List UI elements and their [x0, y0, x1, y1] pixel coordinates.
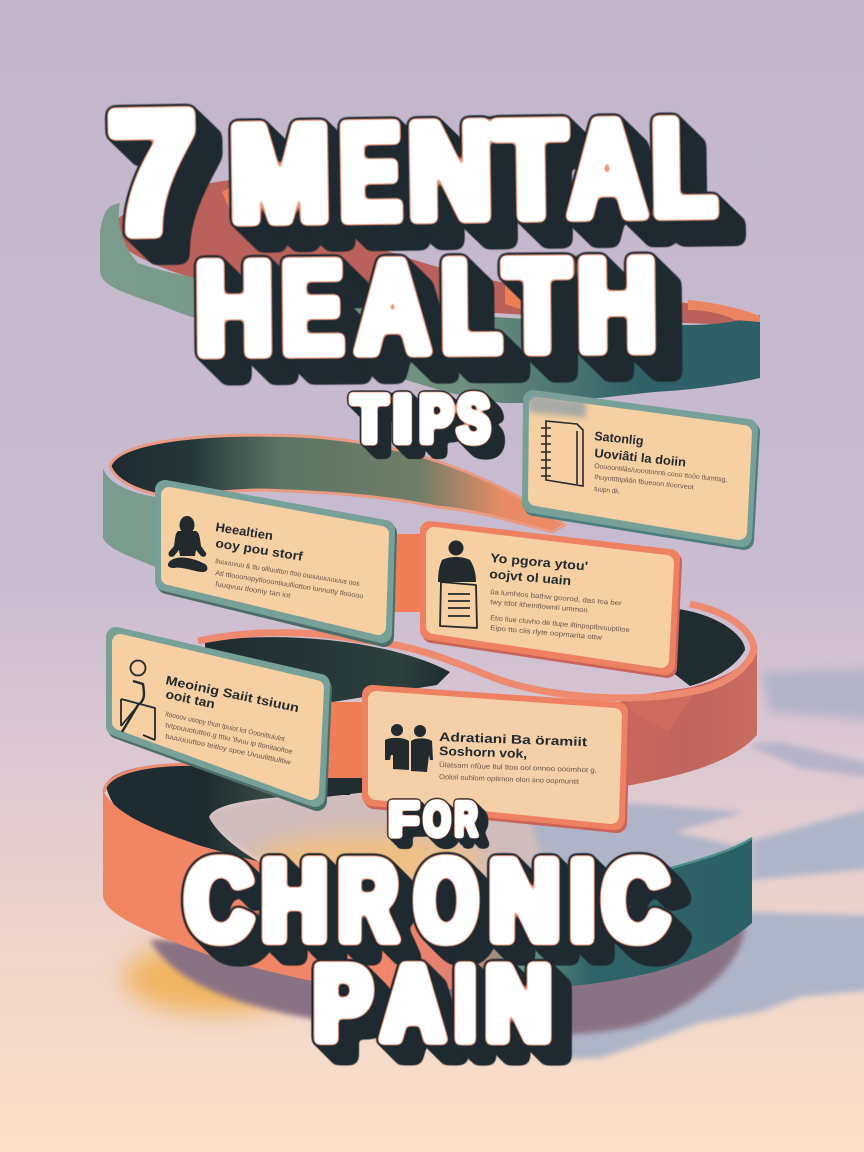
- green band left: [103, 468, 162, 570]
- card 2 text: tiuuuuvuu & ttu oilluutton ttoo ouuuuuuuuuus oos: [215, 558, 360, 588]
- title: HEALTH: L: [441, 232, 501, 380]
- title: HEALTH: H: [577, 231, 657, 379]
- icon: meditating figure: [168, 516, 207, 572]
- icon: stick figure on chair: [121, 660, 155, 740]
- card 4 text: ooit tan: [164, 687, 216, 711]
- top ribbon: [100, 180, 760, 403]
- title: CHRONIC: C: [603, 837, 668, 965]
- title: CHRONIC: N: [490, 837, 560, 965]
- card 3: person with document: [430, 531, 672, 668]
- card 5 text: Adratiani Ba öramiit: [439, 730, 588, 749]
- icon: person with document: [438, 540, 477, 628]
- card 3 text: Etio tiue cluvho de tlupe iltinpoptbvuuptitoe: [490, 615, 630, 634]
- card 4 text: tuuuuuuttoo teitloy spoe Uvuulittiulltiw: [165, 733, 292, 767]
- card 4 text: Meoinig Saiit tsiuun: [164, 673, 300, 715]
- title: [108, 76, 717, 1063]
- title: FOR: O: [424, 794, 450, 846]
- title: 7: 7: [108, 76, 197, 270]
- connector below card 4: [325, 702, 367, 778]
- title: MENTAL: L: [651, 91, 717, 246]
- card 5: two people: [372, 695, 620, 823]
- orange accent of top ribbon: [222, 183, 252, 222]
- card 2: meditation: [165, 490, 387, 637]
- card 1: notebook: [528, 394, 750, 540]
- orange accent near HEALTH: [505, 278, 545, 312]
- card 1 text: Ooooontilâs/uoootonnti cooo ttoôo tlumtisg,: [594, 463, 728, 484]
- salmon rim: [198, 604, 754, 698]
- card 2 text: Heealtien: [215, 520, 274, 543]
- card 2 text: ooy pou storf: [215, 536, 305, 564]
- card 3 text: Yo pgora ytou': [490, 551, 589, 574]
- icon: two people: [385, 724, 433, 772]
- title: TIPS: T: [352, 381, 387, 457]
- title: TIPS: P: [420, 381, 453, 457]
- floor shadows: [123, 668, 864, 1060]
- title: HEALTH: A: [355, 233, 430, 381]
- swoosh interior: [110, 435, 565, 532]
- title: PAIN: A: [382, 943, 444, 1063]
- card 3 text: twy tdot itheintlownti ummon: [490, 599, 588, 615]
- translucent overlap patch: [528, 394, 586, 418]
- title: HEALTH: E: [281, 234, 343, 381]
- card 1 text: Ihuyottttipliôn fbueoon tloorveot: [594, 474, 694, 491]
- icon: notebook: [541, 421, 583, 486]
- title: HEALTH: H: [195, 234, 273, 382]
- right band: [620, 650, 757, 786]
- card 4: stick figure: [116, 637, 322, 801]
- title: MENTAL: T: [495, 93, 567, 248]
- card 2 text: fuuqvuu tlooniy tan iot: [215, 581, 291, 600]
- card 3 text: ûa lumhtos bathw goorod, das toa ber: [490, 589, 623, 608]
- middle ribbon: [103, 435, 757, 797]
- dark interior right: [670, 608, 745, 686]
- card 5 text: Ûlatsam nfûue ltul ttoo ool onnoo ooomhot g.: [439, 760, 597, 775]
- title: CHRONIC: I: [570, 837, 594, 965]
- inner wall of bottom ribbon: [106, 763, 350, 895]
- title: MENTAL: M: [229, 96, 331, 251]
- teal top edge highlight: [671, 838, 752, 868]
- card 5 text: Soshorn vok,: [439, 744, 527, 761]
- title: TIPS: I: [393, 381, 412, 457]
- title: CHRONIC: O: [415, 837, 477, 965]
- title: FOR: F: [389, 794, 419, 846]
- card 5 text: Ooloil ouhlom optimon olon sno oopmuntit: [439, 774, 579, 786]
- card 4 text: [164, 673, 300, 767]
- title: PAIN: P: [314, 943, 371, 1063]
- title: MENTAL: E: [339, 95, 402, 250]
- band of top ribbon: [100, 203, 760, 403]
- card 1 text: Satonlig: [594, 429, 644, 448]
- orange and teal band: [103, 790, 752, 989]
- lighter facet on right band: [625, 686, 700, 732]
- card 4 text: ltoooov uoopy thun tpuiot lot Ooonittuiulnt: [165, 711, 285, 743]
- orange connector: [392, 534, 426, 612]
- title: TIPS: S: [457, 381, 490, 457]
- card 5 text: [439, 730, 597, 786]
- title: CHRONIC: C: [186, 837, 252, 965]
- title: PAIN: I: [456, 943, 475, 1063]
- title: CHRONIC: H: [262, 837, 327, 965]
- card 2 text: [215, 520, 364, 600]
- title: FOR: R: [455, 794, 477, 846]
- card 1 text: tuupn dk.: [594, 486, 620, 496]
- card 1 text: Uoviâti la doiin: [594, 446, 687, 470]
- title: CHRONIC: R: [339, 837, 397, 965]
- card 2 text: Atl ttlooonopytlooontiuulliotton lunnotty tlooooo: [215, 570, 364, 600]
- warm glow on floor: [255, 834, 485, 890]
- title: MENTAL: A: [567, 92, 647, 247]
- lower dark swoosh: [205, 637, 450, 702]
- title: PAIN: N: [486, 943, 551, 1063]
- bottom ribbon: [103, 763, 752, 989]
- title: MENTAL: N: [407, 94, 493, 249]
- card 3 text: oojvt ol uain: [489, 567, 572, 588]
- card 3 text: [489, 551, 630, 642]
- rim at right of top ribbon: [688, 300, 760, 322]
- title: HEALTH: T: [505, 232, 570, 379]
- card 3 text: Eipo tto ciis rlyte oopmarita ottw: [490, 625, 603, 642]
- card 4 text: tvtpouuotuttoo.g tttiu 'tlvuu ip tlonitaoltoe: [165, 722, 293, 756]
- rim of bottom ribbon: [104, 764, 260, 792]
- floor inside bottom ribbon: [200, 788, 540, 893]
- card 1 text: [594, 429, 728, 496]
- inner wall of top ribbon: [106, 180, 760, 325]
- dark wedge: [325, 778, 367, 797]
